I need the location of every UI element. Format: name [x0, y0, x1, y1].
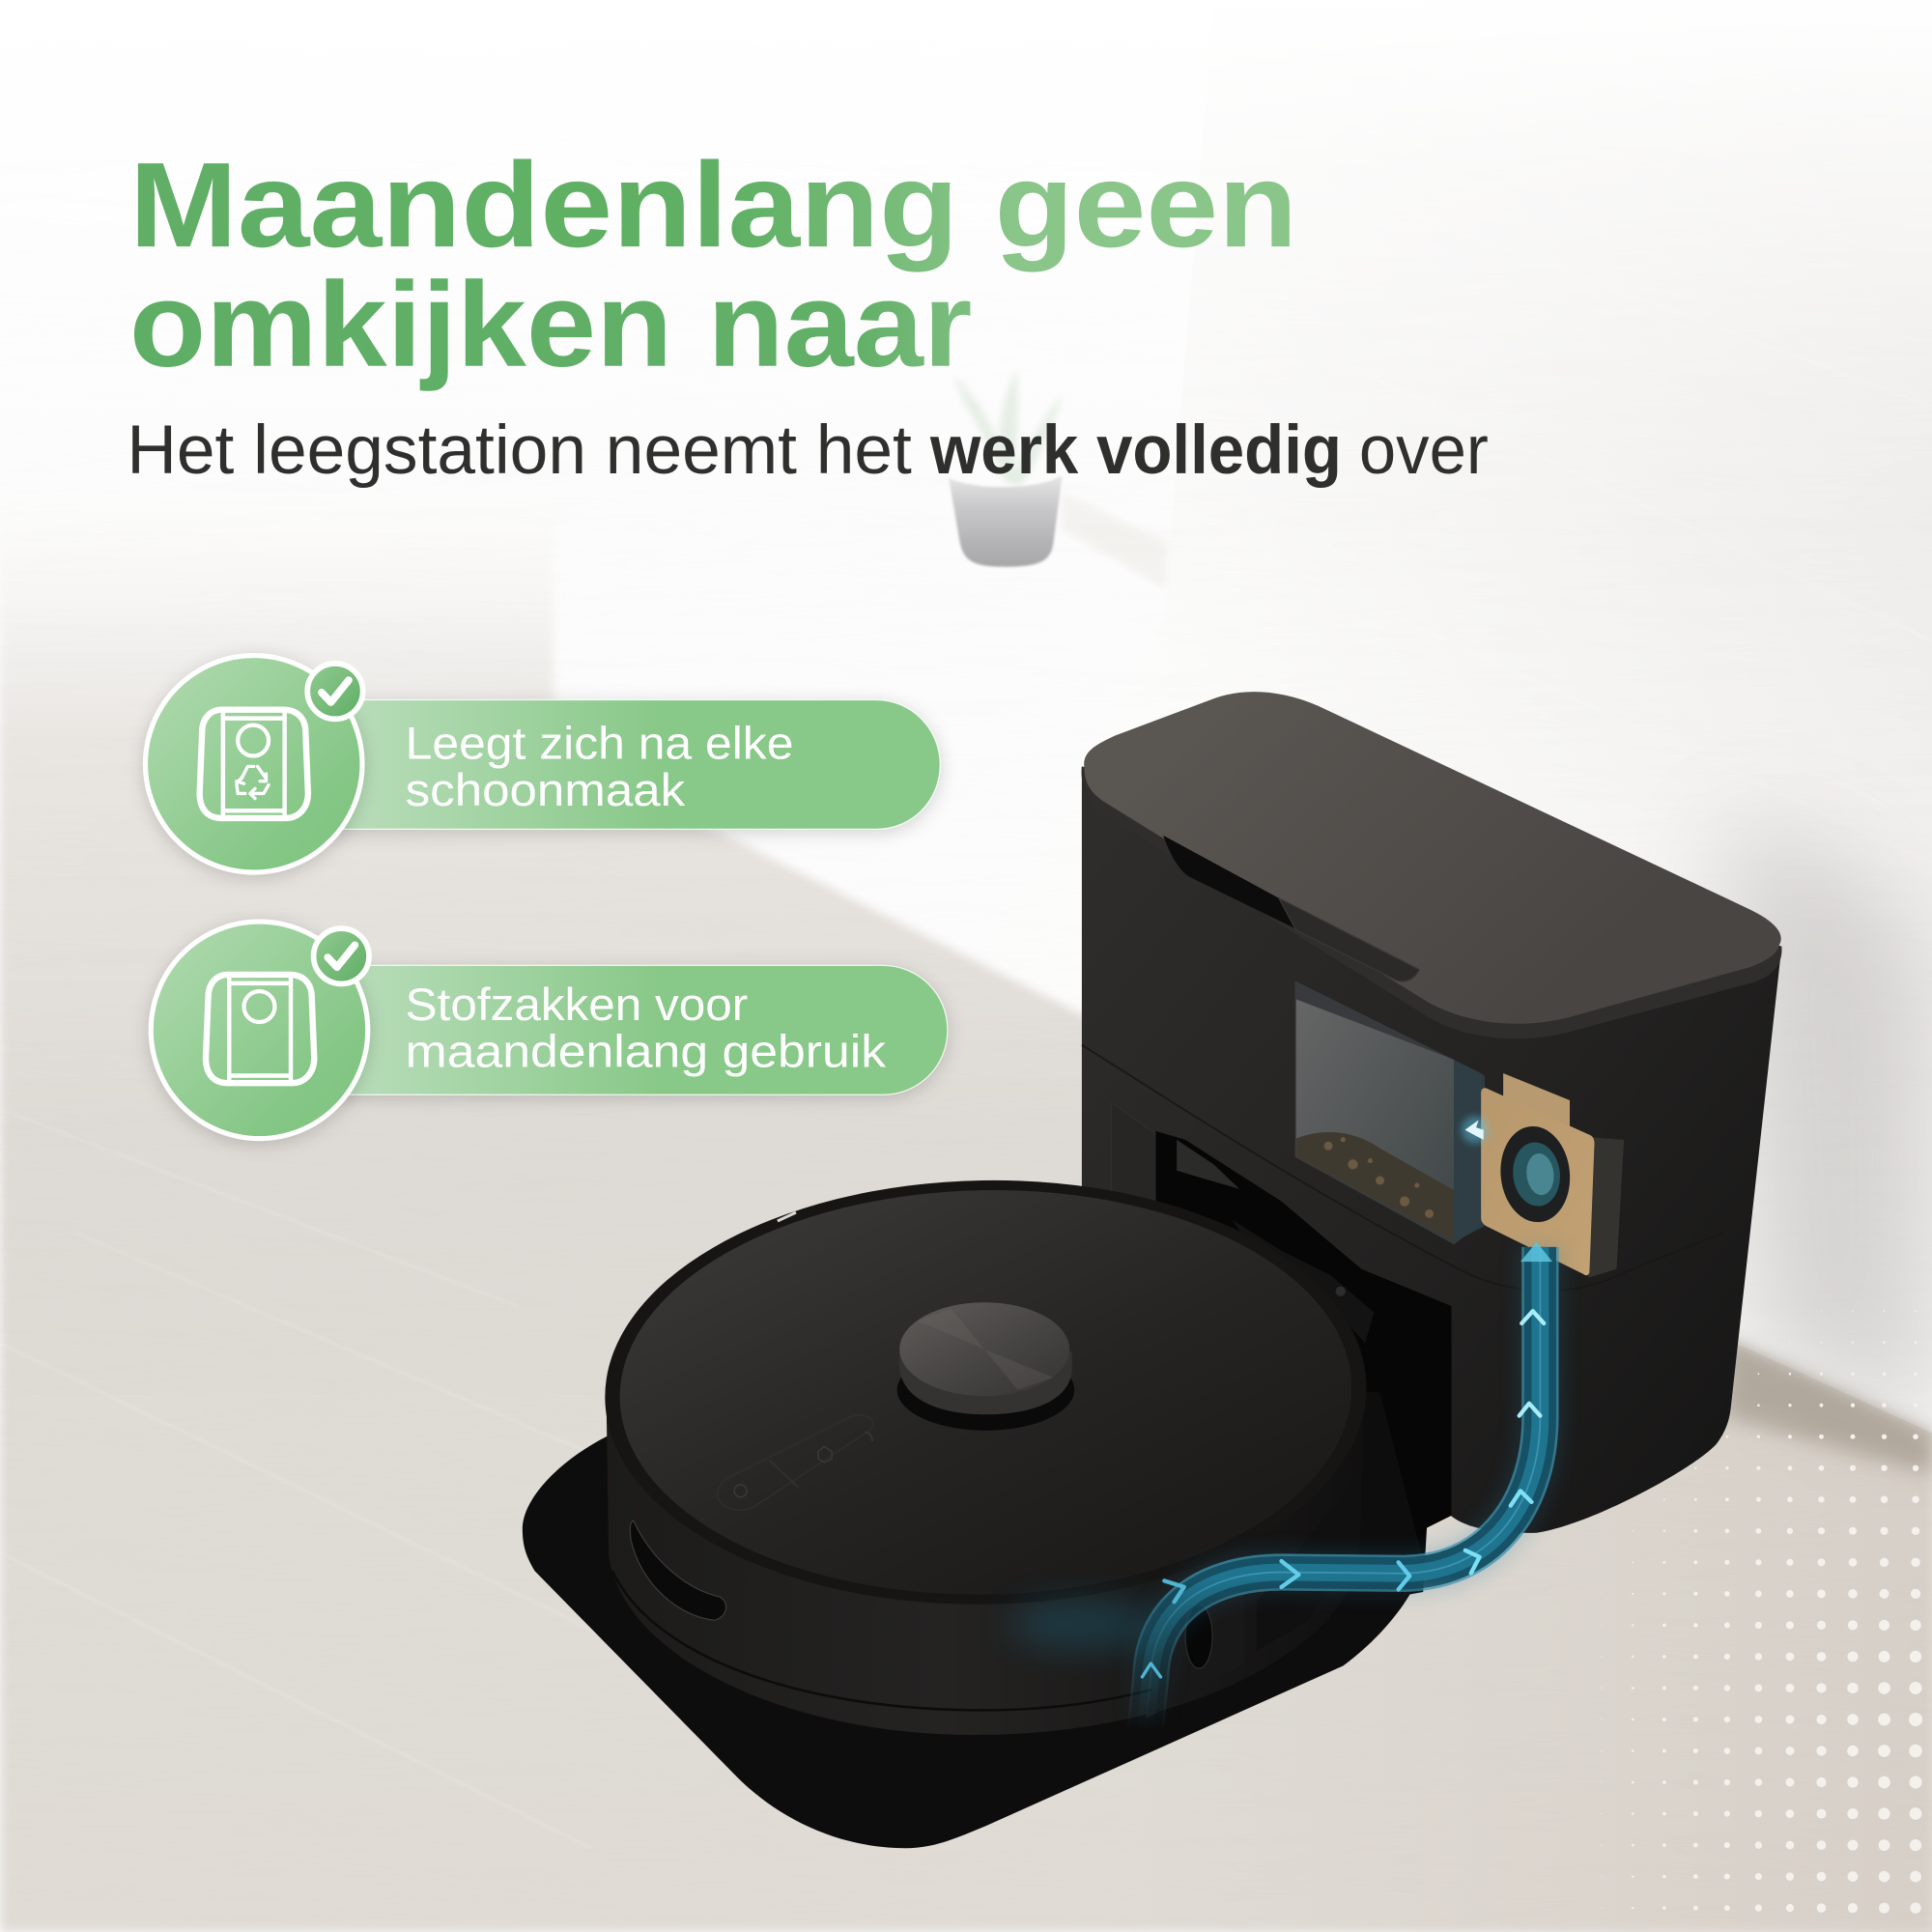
title: [129, 138, 1297, 392]
pill 2: [327, 965, 948, 1094]
check badge 1: [307, 664, 363, 719]
icon: dust bag with recycling: [200, 710, 308, 818]
right sensor panel: [1146, 1589, 1244, 1719]
plant in grey pot: [949, 370, 1168, 589]
lower dock panel: [1112, 1103, 1155, 1213]
dust bag: [1481, 1073, 1595, 1275]
side slot: [630, 1520, 726, 1620]
icon: dust bag: [206, 975, 314, 1083]
dock recess: [1155, 1131, 1452, 1627]
check badge 2: [314, 928, 369, 983]
lidar cap: [899, 1302, 1072, 1414]
robot top disc: [616, 1184, 1355, 1601]
sensor hole: [1185, 1605, 1212, 1668]
seam lines on body: [1082, 1045, 1725, 1291]
feature 2: [151, 922, 948, 1139]
subtitle: werk volledig: [929, 412, 1342, 489]
pill 2: Stofzakken voor: [406, 980, 748, 1031]
vent: [1257, 1479, 1355, 1651]
lid edge: [1082, 766, 1782, 1038]
white fade over top of image: [0, 0, 1932, 542]
blue airflow tube: [1144, 1247, 1540, 1749]
title: Maandenlang geen: [129, 138, 1297, 272]
feature 1: [146, 656, 940, 872]
mat under robot: [523, 1355, 1424, 1848]
arrow head at dust bag: [1520, 1242, 1552, 1262]
pill 2: maandenlang gebruik: [406, 1027, 887, 1078]
station body: [1082, 766, 1781, 1533]
docking station: [1082, 692, 1782, 1627]
airflow glow near robot: [1010, 1600, 1158, 1649]
pill 1: Leegt zich na elke: [406, 719, 793, 770]
title: omkijken naar: [129, 258, 972, 392]
robot rim: [602, 1174, 1370, 1611]
subtitle: [127, 412, 1489, 489]
rim notch: [778, 1212, 796, 1221]
halftone dot pattern: [1601, 1310, 1922, 1914]
subtitle: over: [1359, 412, 1489, 489]
circle 1: [146, 656, 362, 872]
handle slot: [1163, 836, 1296, 929]
pill 1: schoonmaak: [406, 765, 686, 816]
pill 1: [321, 699, 940, 829]
robot vacuum: [602, 1174, 1370, 1735]
subtitle: Het leegstation neemt het: [127, 412, 912, 489]
lid top surface: [1084, 692, 1781, 1024]
circle 2: [151, 922, 368, 1139]
dust bag back: [1588, 1137, 1624, 1278]
robot side wall: [607, 1390, 1364, 1735]
lidar neck: [897, 1350, 1074, 1431]
dock inner parts: [1177, 1140, 1374, 1343]
flow chevrons: [1142, 1311, 1544, 1677]
handle flap: [1279, 898, 1419, 981]
small flow arrow by window: [1462, 1117, 1489, 1144]
control strip: [717, 1415, 873, 1510]
bumper seam: [612, 1571, 1244, 1710]
dust window: [1295, 980, 1485, 1244]
